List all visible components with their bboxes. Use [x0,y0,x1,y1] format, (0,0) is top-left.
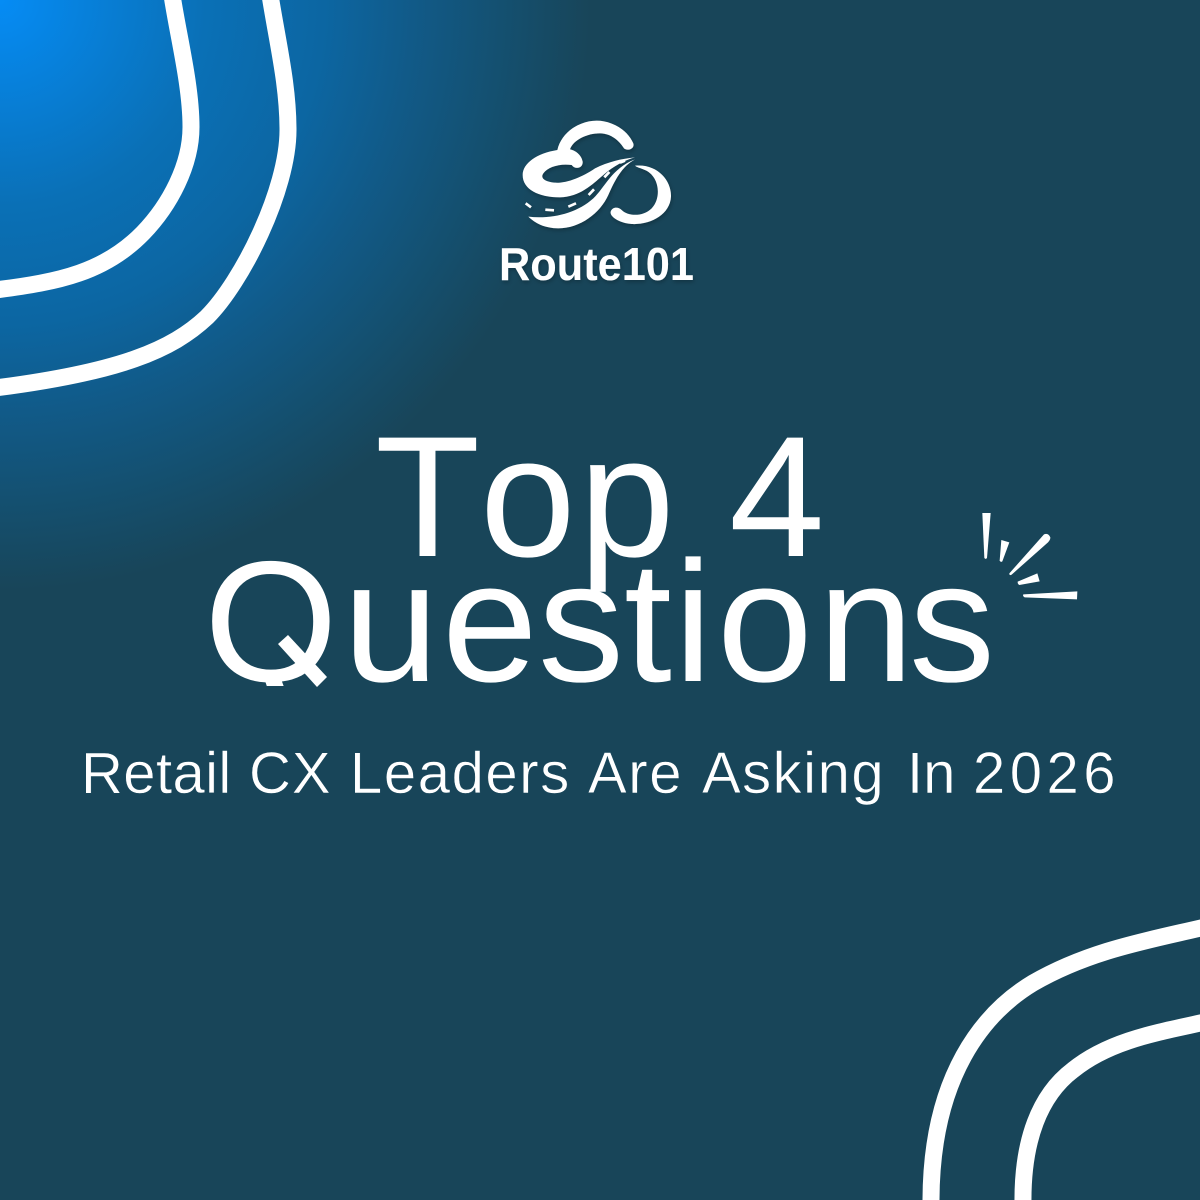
subtitle: Asking [702,741,885,806]
title [204,401,995,718]
icon: sparkle accent [982,513,1077,599]
logo wordmark: Route101 [499,238,694,290]
subtitle: 2026 [973,741,1120,806]
subtitle: CX [249,741,332,806]
subtitle: In [907,741,955,806]
title: Questions [204,526,995,718]
road curves: top left [0,0,288,388]
title: Top 4 [375,401,825,593]
Q tail [252,635,328,718]
subtitle: Retail [81,741,232,806]
subtitle: Leaders [350,741,571,806]
logo: Route101 [499,121,694,290]
icon: cloud and road [523,121,671,228]
subtitle: Are [588,741,683,806]
road curves: bottom right [931,927,1200,1200]
